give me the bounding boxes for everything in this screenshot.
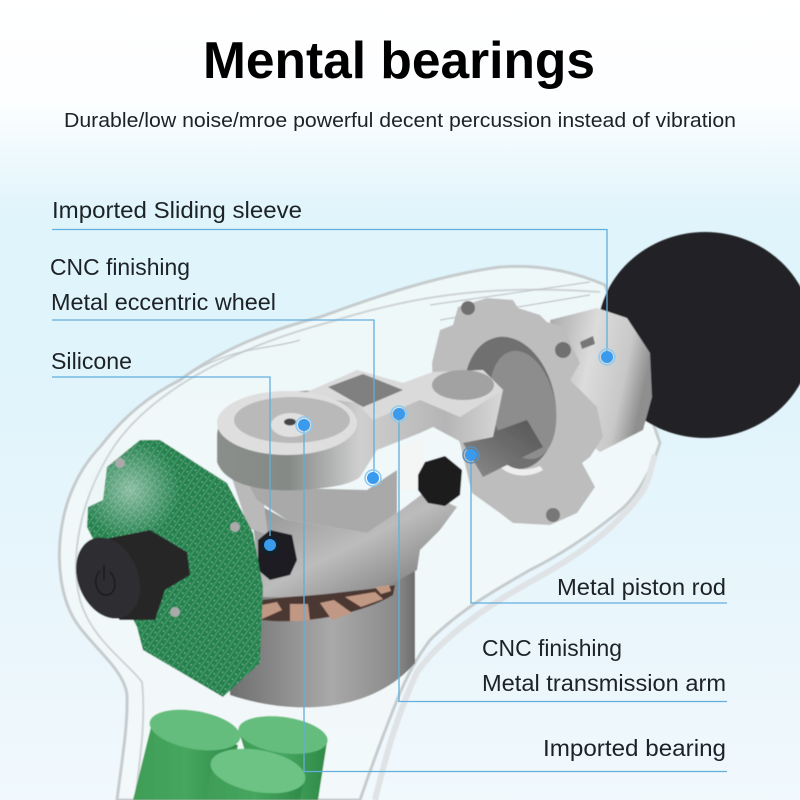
transmission arm <box>217 370 503 490</box>
callout: CNC finishing Metal transmission arm: Metal transmission arm <box>482 670 726 696</box>
callout: CNC finishing Metal transmission arm: CNC finishing <box>482 635 622 661</box>
callout: Metal piston rod <box>463 447 727 603</box>
black arm screw <box>418 456 462 506</box>
piston rod <box>463 420 543 477</box>
callout: Imported bearing: Imported bearing <box>543 735 726 761</box>
power button <box>64 528 190 628</box>
white panel behind arm <box>397 438 425 490</box>
title: Mental bearings <box>203 32 595 90</box>
massage ball head <box>597 232 800 438</box>
callout: CNC finishing Metal eccentric wheel <box>50 254 381 486</box>
motor body <box>230 560 415 707</box>
batteries <box>133 703 330 800</box>
callout: Imported Sliding sleeve <box>52 197 615 365</box>
callout: Imported bearing <box>296 417 727 772</box>
head cylinder <box>550 308 652 452</box>
subtitle: Durable/low noise/mroe powerful decent percussion instead of vibration <box>64 110 736 132</box>
silicone damper screw <box>258 530 297 580</box>
transparent shell <box>59 266 660 800</box>
callout: Silicone: Silicone <box>51 348 132 374</box>
callout: Imported Sliding sleeve: Imported Sliding sleeve <box>52 197 302 223</box>
massage gun illustration <box>59 232 800 800</box>
callout: CNC finishing Metal eccentric wheel: CNC finishing <box>50 254 190 280</box>
motor coils <box>262 585 395 621</box>
callout: CNC finishing Metal transmission arm <box>391 406 727 702</box>
callout: CNC finishing Metal eccentric wheel: Metal eccentric wheel <box>51 289 276 315</box>
flange <box>432 298 603 525</box>
callout: Silicone <box>51 348 279 554</box>
neck between disc and board <box>232 478 268 535</box>
block under arm <box>250 470 397 533</box>
under-arm base <box>250 492 457 597</box>
circuit board <box>80 440 263 697</box>
callout: Metal piston rod: Metal piston rod <box>557 574 726 600</box>
